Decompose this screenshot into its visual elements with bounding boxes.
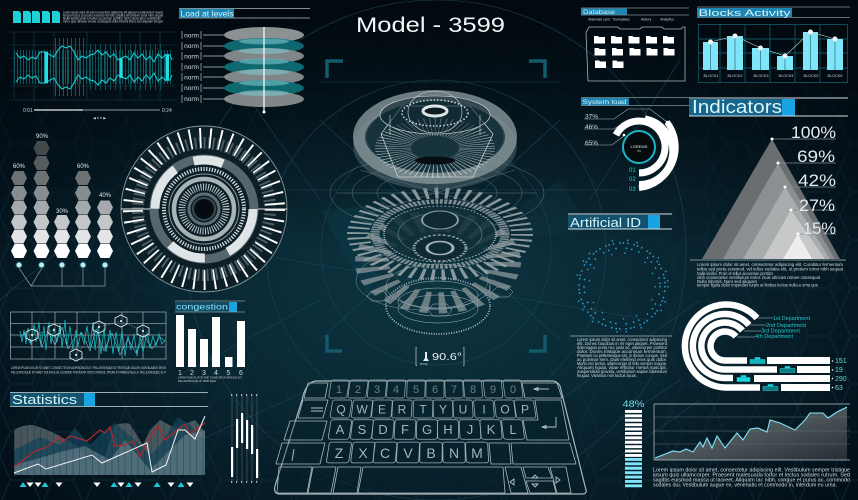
bar chart: congestion: 2 bbox=[190, 370, 194, 377]
chart: load level ellipses: norm bbox=[184, 96, 199, 103]
keyboard: 2 bbox=[355, 384, 361, 396]
chart: departments rings: 3rd Department bbox=[761, 328, 801, 334]
keyboard bbox=[275, 380, 586, 494]
keyboard: 0 bbox=[510, 384, 516, 396]
text block: growth description: ipsum quis ullamcorper. Praesent malesuada tortor et lectus sodales rutrum. Sed bbox=[653, 472, 850, 478]
text block: artificial id description: Aliquam ligula, vitae efficitur metus suscipit. bbox=[577, 365, 667, 370]
text block: signal caption: PELLENTESQUE SIT AMET DUI FACILISI, EUISMOD TINCIDUNT ODIO CONGUE. PROIN ET FINIBUS NULLA. PELLENTESQUE ELIT bbox=[11, 370, 167, 374]
heading: database bbox=[581, 8, 689, 16]
text block: growth description bbox=[653, 468, 850, 488]
panel: database folders bbox=[586, 18, 685, 81]
bar chart: blocks activity bbox=[698, 24, 848, 82]
text block: top left description: Lorem ipsum dolor sit amet consectetur adipiscing elit aliquam condimentum massa bbox=[63, 10, 163, 14]
chart: hexagon columns: 30% bbox=[56, 209, 69, 215]
text block: signal caption: LOREM IPSUM DOLOR SIT AMET, CONSECTETUR ADIPISCING ELIT. PELLENTESQUE ID TRISTIQUE DOLOR, NON BLANDIT EROS bbox=[11, 366, 166, 370]
chart: system load rings: 37% bbox=[585, 114, 598, 120]
keyboard: 6 bbox=[432, 384, 438, 396]
text block: artificial id description: elit. Donec faucibus in mi eget aliquet. Praesent bbox=[577, 341, 668, 346]
middle blade disc bbox=[358, 193, 522, 275]
chart: statistics area and lines bbox=[14, 416, 205, 487]
heading: blocks activity: Blocks Activity bbox=[698, 8, 791, 18]
panel: database folders: Analytics bbox=[660, 18, 674, 22]
heading: load at levels bbox=[179, 8, 310, 18]
chart: waveform bbox=[10, 32, 175, 100]
chart: system load rings: 03 bbox=[629, 187, 636, 193]
bar chart: blocks activity: BLOCK1 bbox=[704, 74, 718, 78]
heading: indicators: Indicators bbox=[692, 97, 782, 117]
panel: database folders: Themplates bbox=[612, 18, 630, 22]
keyboard: K bbox=[487, 422, 496, 437]
chart: departments rings: 1st Department bbox=[773, 316, 811, 322]
bar chart: congestion: 5 bbox=[227, 370, 231, 377]
icon: turbine disc top view bbox=[121, 126, 287, 292]
heading: statistics bbox=[10, 392, 208, 407]
text block: artificial id description: Suspendisse gravida, vestibulum sapien bibendum bbox=[577, 369, 667, 374]
text block: signal caption bbox=[11, 366, 167, 374]
top disc bbox=[353, 91, 517, 190]
chart: load level ellipses: norm bbox=[184, 64, 199, 71]
keyboard: P bbox=[521, 402, 529, 416]
text block: artificial id description: Morbi orci lectus, ullamcorper id felis semper magna. bbox=[577, 361, 667, 366]
chart: indicator pyramid: 100% bbox=[791, 123, 836, 142]
keyboard: G bbox=[422, 422, 432, 437]
chart: departments rings: 151 bbox=[835, 358, 847, 365]
chart: hexagon columns bbox=[11, 134, 113, 286]
bar chart: congestion: 4 bbox=[214, 370, 218, 377]
keyboard: T bbox=[419, 402, 427, 416]
keyboard: 7 bbox=[451, 384, 457, 396]
keyboard: E bbox=[378, 402, 386, 416]
heading: database: Database bbox=[583, 10, 616, 16]
text block: artificial id description: Praesent eu pellentesque est, in dictum congue. Sed bbox=[577, 353, 667, 358]
readout: temperature: temp bbox=[420, 362, 428, 366]
bar chart: congestion: 1 bbox=[178, 370, 182, 377]
chart: indicator pyramid: 27% bbox=[799, 196, 835, 215]
keyboard: 5 bbox=[413, 384, 419, 396]
timeline scrubber bbox=[23, 108, 172, 122]
keyboard: 3 bbox=[374, 384, 380, 396]
icon: exploded engine model bbox=[330, 91, 544, 334]
icon row: file icons bbox=[13, 11, 60, 23]
lower blades bbox=[372, 221, 504, 303]
chart: growth area bbox=[654, 404, 850, 460]
keyboard: 1 bbox=[336, 384, 342, 396]
chart: indicator pyramid: 42% bbox=[798, 171, 836, 190]
keyboard: B bbox=[426, 445, 436, 461]
keyboard: O bbox=[500, 402, 510, 416]
text block: indicators description: nibh consectetur vestibulum tortor. Duis ultricies ornare consequat bbox=[697, 275, 821, 280]
text block: top left description bbox=[63, 10, 164, 24]
keyboard: S bbox=[358, 422, 367, 437]
lower wire cylinder bbox=[356, 250, 513, 334]
panel: database folders: Materials card bbox=[588, 18, 610, 22]
viewfinder brackets bbox=[327, 61, 545, 351]
keyboard: Y bbox=[439, 402, 447, 416]
keyboard: 9 bbox=[490, 384, 496, 396]
heading: system load bbox=[581, 98, 689, 106]
keyboard: R bbox=[398, 402, 407, 416]
keyboard: H bbox=[443, 422, 453, 437]
timeline scrubber: ◂ ▪ ▪ ▸ bbox=[93, 116, 106, 122]
chart: indicator pyramid: 69% bbox=[797, 147, 835, 166]
keyboard: C bbox=[380, 445, 390, 461]
heading: indicators bbox=[689, 97, 848, 117]
bar meter: 48 percent: 48% bbox=[622, 399, 645, 410]
bar chart: blocks activity: BLOCK4 bbox=[779, 74, 793, 78]
text block: indicators description bbox=[697, 262, 844, 288]
chart: system load rings: 01 bbox=[629, 168, 636, 174]
chart: signal with hexagon markers bbox=[10, 312, 166, 361]
keyboard: 4 bbox=[393, 384, 399, 396]
chart: indicator pyramid: 15% bbox=[803, 219, 836, 238]
heading: congestion bbox=[175, 301, 245, 312]
heading: artificial id: Artificial ID bbox=[570, 215, 641, 230]
text block: growth description: sodales dui. Vestibulum augue ex, venenatis et commodo in, interdum eu urna. bbox=[653, 482, 837, 488]
chart: load level ellipses: norm bbox=[184, 54, 199, 60]
chart: indicator pyramid bbox=[690, 123, 846, 260]
heading: statistics: Statistics bbox=[12, 393, 77, 407]
chart: load level ellipses bbox=[182, 27, 304, 114]
bar chart: congestion: 6 bbox=[239, 370, 243, 377]
keyboard: V bbox=[403, 445, 413, 461]
bar chart: congestion bbox=[176, 315, 245, 383]
keyboard: J bbox=[467, 422, 473, 437]
text block: indicators description: tempor ligula dolor imperdiet turpis at finibus lectus nulla a urna que bbox=[697, 282, 818, 288]
chart: departments rings: 63 bbox=[835, 385, 843, 392]
text block: indicators description: Lorem ipsum dolor sit amet, consectetur adipiscing elit. Curabitur fermentum bbox=[697, 262, 843, 267]
bar chart: blocks activity: BLOCK3 bbox=[754, 74, 768, 78]
chart: system load rings: LOREMS bbox=[631, 144, 648, 149]
keyboard: U bbox=[459, 402, 467, 416]
bar chart: blocks activity: BLOCK5 bbox=[804, 74, 818, 78]
chart: system load rings: ▪▪▪ bbox=[637, 149, 641, 153]
text block: top left description: Nulla facilisi proin et tellus accumsan porttitor nibh consectetur vestibulum bbox=[63, 16, 161, 20]
bar chart: congestion: 3 bbox=[202, 370, 206, 377]
chart: system load rings: 65% bbox=[585, 140, 598, 147]
text block: artificial id description: ac pulvinar sem. Duis eleifend eros quis dolor. bbox=[577, 357, 667, 362]
keyboard: I bbox=[482, 402, 486, 416]
chart: departments rings bbox=[685, 305, 847, 392]
text block: artificial id description: Lorem ipsum dolor sit amet, consectetur adipiscing bbox=[577, 337, 667, 342]
text block: indicators description: Nulla lobortis. Nam sed aliquam bbox=[697, 279, 757, 284]
heading: load at levels: Load at levels bbox=[180, 8, 234, 18]
text block: growth description: sagittis euismod massa ut laoreet. Aliquam lac nibh, congue et purus ac, commodo bbox=[653, 478, 850, 484]
bar chart: congestion: PELLENTESQUE ID TRISTIQUE bbox=[178, 380, 216, 383]
heading: blocks activity bbox=[697, 7, 850, 18]
heading: artificial id bbox=[568, 214, 672, 230]
bar chart: blocks activity: BLOCK6 bbox=[828, 74, 842, 78]
title: Model - 3599 bbox=[356, 14, 505, 37]
chart: hexagon columns: 60% bbox=[77, 164, 90, 170]
timeline scrubber: 0:24 bbox=[162, 108, 172, 114]
heading: system load: System load bbox=[582, 99, 627, 106]
keyboard: 8 bbox=[470, 384, 476, 396]
chart: load level ellipses: norm bbox=[184, 43, 199, 50]
chart: load level ellipses: norm bbox=[184, 74, 199, 82]
text block: artificial id description: dolor. Donec tristique accumsan fermentum. bbox=[577, 349, 667, 354]
timeline scrubber: 0:01 bbox=[23, 108, 33, 114]
chart: departments rings: 19 bbox=[835, 367, 843, 374]
text block: artificial id description: feugiat. Vivamus non luctus lacus. bbox=[577, 373, 637, 378]
keyboard: A bbox=[336, 422, 345, 437]
chart: hexagon columns: 60% bbox=[13, 164, 26, 170]
bar chart: congestion: LOREM IPSUM DOLOR SIT AMET CONSECTETUR ADIPISCING ELIT bbox=[178, 376, 242, 380]
readout: temperature bbox=[416, 348, 464, 366]
text block: top left description: tortor quis ultricies ornare consequat nulla lobortis libero sed aliquam tempor bbox=[63, 20, 164, 24]
text block: artificial id description: doleniqquis porta nec justo ac, ullamcorper porttitor bbox=[577, 345, 667, 350]
chart: departments rings: 290 bbox=[835, 376, 847, 383]
text block: growth description: Lorem ipsum dolor sit amet, consectetur adipiscing elit. Vestibulum semper tristique bbox=[653, 468, 850, 474]
text block: top left description: tempor lectus sed porta euismod vel felis sodales elit pretium tortor nibh sequat bbox=[63, 14, 163, 18]
keyboard: N bbox=[449, 445, 459, 461]
text block: indicators description: Nulla facilisi. Proin et tellus accumsan porttitor bbox=[697, 271, 773, 276]
chart: vertical candle bars bbox=[231, 395, 259, 482]
keyboard: X bbox=[358, 445, 368, 461]
panel: database folders: History bbox=[641, 18, 652, 22]
chart: system load rings: 46% bbox=[585, 124, 598, 131]
chart: system load rings bbox=[584, 109, 676, 193]
text block: indicators description: tellus sed porta euismod, vel tellus sodales elit, ut pretium tortor nibh sequat bbox=[697, 266, 844, 272]
keyboard: D bbox=[378, 422, 388, 437]
bar chart: blocks activity: BLOCK2 bbox=[728, 74, 742, 78]
chart: departments rings: 4th Department bbox=[755, 334, 794, 340]
keyboard: Z bbox=[335, 445, 344, 461]
chart: hexagon columns: 40% bbox=[99, 193, 112, 199]
text block: artificial id description bbox=[570, 336, 672, 378]
heading: congestion: congestion bbox=[176, 302, 228, 312]
bar meter: 48 percent bbox=[622, 399, 645, 488]
keyboard: F bbox=[401, 422, 409, 437]
chart: load level ellipses: norm bbox=[184, 85, 199, 92]
chart: load level ellipses: norm bbox=[184, 32, 199, 40]
keyboard: W bbox=[356, 402, 368, 416]
chart: particle ring bbox=[576, 240, 668, 332]
keyboard: L bbox=[509, 422, 517, 437]
chart: departments rings: 2nd Department bbox=[766, 323, 807, 329]
readout: temperature: 90.6° bbox=[432, 351, 462, 363]
chart: system load rings: 02 bbox=[629, 177, 636, 183]
keyboard: Q bbox=[336, 402, 346, 416]
keyboard: M bbox=[471, 445, 483, 461]
chart: hexagon columns: 90% bbox=[36, 134, 49, 140]
